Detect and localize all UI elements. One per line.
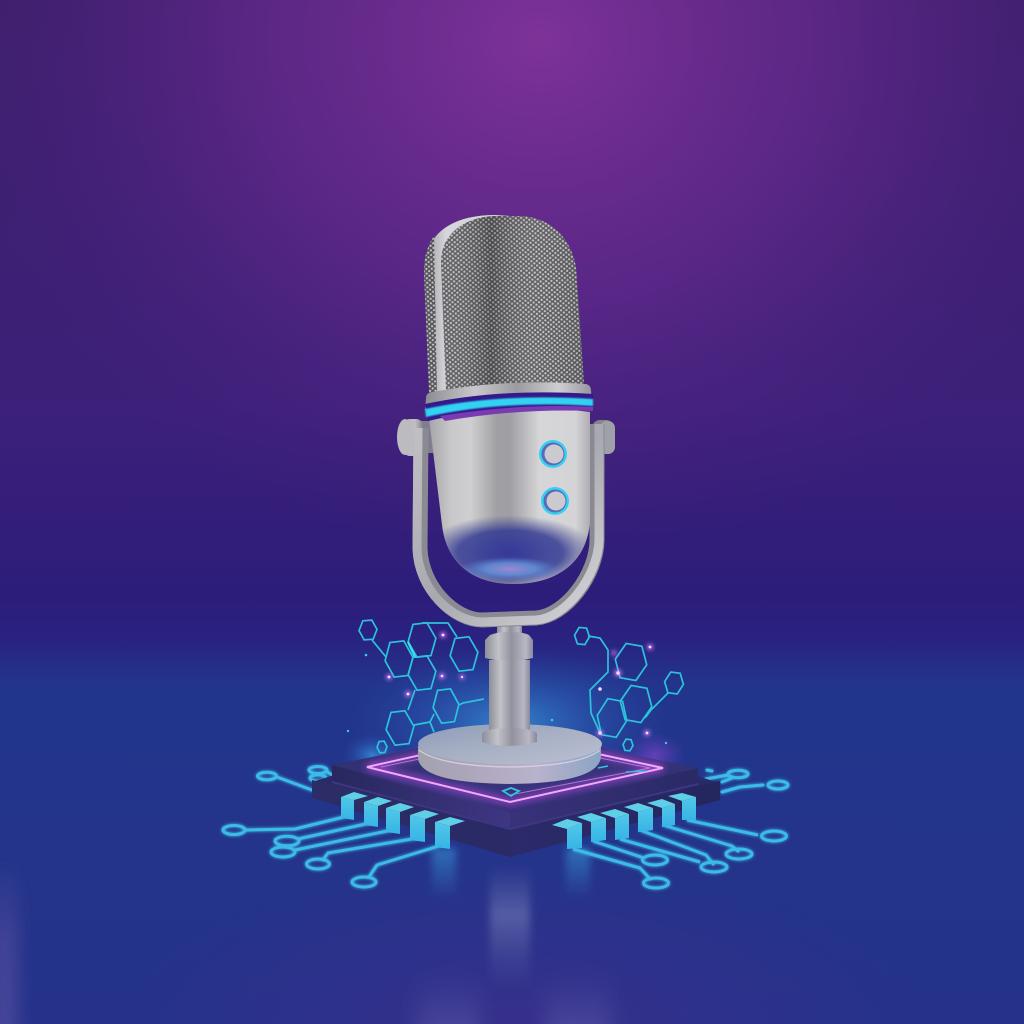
microphone buttons [539,440,569,515]
chip: upper plate [332,730,698,830]
microphone body [429,410,590,584]
hexagon network: left [358,620,484,753]
floor reflection [418,848,611,1024]
microphone pivots [397,419,615,456]
microphone fork cradle [417,424,599,622]
microphone collar with cyan ring [425,382,593,421]
microphone grille [424,214,587,396]
chip: back traces [258,766,788,792]
hexagon network: right [574,627,685,751]
base disc [418,724,602,784]
chip: left traces [223,816,442,887]
chip: left pins [341,792,465,849]
chip: lower plate [312,720,720,857]
chip: right pins [552,793,696,849]
holographic glow behind base [342,647,685,797]
chip: right traces [573,820,786,888]
chip: small cyan pads [503,766,646,796]
stem [482,625,537,746]
chip: neon outline [367,735,663,802]
glowing particles [347,632,667,744]
